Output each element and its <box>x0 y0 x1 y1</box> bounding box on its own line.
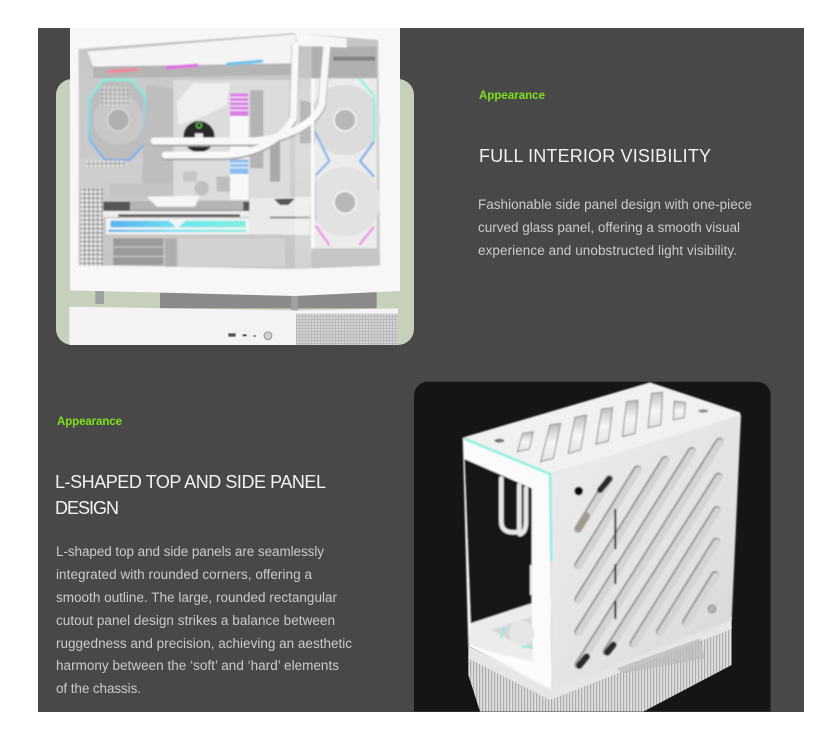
PCIe brackets <box>113 238 285 267</box>
green backdrop card <box>56 79 414 345</box>
text block: bottom description: smooth outline. The large, rounded rectangular <box>56 590 338 605</box>
heading: L-shaped top and side panel design: L-SHAPED TOP AND SIDE PANEL <box>55 472 326 492</box>
top shroud <box>87 34 297 67</box>
base mesh vent <box>296 314 398 345</box>
text block: bottom description: cutout panel design strikes a balance between <box>56 613 335 628</box>
ribbed base unit <box>468 617 732 712</box>
motherboard <box>110 80 290 200</box>
side panel with diagonal cutouts <box>550 415 741 690</box>
rear fan <box>80 78 147 160</box>
perforated rear panel <box>81 188 103 266</box>
RAM sticks with RGB <box>230 93 248 200</box>
text block: bottom description: ruggedness and precision, achieving an aesthetic <box>56 636 352 651</box>
support legs <box>95 290 298 311</box>
panel: case exterior photo <box>414 382 771 712</box>
cyan light edge <box>465 439 551 562</box>
text block: top description <box>478 197 752 258</box>
black backdrop card <box>414 382 771 712</box>
heading: L-shaped top and side panel design: DESIGN <box>55 498 119 518</box>
text block: bottom description: L-shaped top and side panels are seamlessly <box>56 544 324 559</box>
text block: bottom description <box>56 544 352 696</box>
glass window <box>79 33 380 269</box>
lower base chassis <box>69 307 398 345</box>
text block: top description: curved glass panel, offering a smooth visual <box>478 220 740 235</box>
stand shadow strip <box>160 292 377 308</box>
liquid cooling tubes <box>300 100 315 143</box>
top face with slots <box>463 382 741 474</box>
front ports <box>228 332 272 340</box>
front frame and window <box>463 437 552 690</box>
panel: PC case interior photo <box>56 25 414 345</box>
graphics card <box>103 196 310 235</box>
text block: top description: experience and unobstructed light visibility. <box>478 243 737 258</box>
text block: bottom description: integrated with rounded corners, offering a <box>56 567 312 582</box>
text block: top description: Fashionable side panel design with one-piece <box>478 197 752 212</box>
text block: bottom description: harmony between the ‘soft’ and ‘hard’ elements <box>56 658 339 673</box>
front fans <box>310 78 380 248</box>
RGB light strips <box>107 61 263 72</box>
heading: full interior visibility: FULL INTERIOR VISIBILITY <box>479 146 711 166</box>
label: Appearance (bottom): Appearance <box>57 416 122 428</box>
heading: L-shaped top and side panel design <box>55 472 326 518</box>
pump display <box>183 121 215 152</box>
glass corner highlight <box>295 33 312 269</box>
chassis floor with fan <box>468 603 533 662</box>
text block: bottom description: of the chassis. <box>56 681 141 696</box>
white case body <box>70 25 400 296</box>
label: Appearance (top): Appearance <box>479 90 545 102</box>
cooling tubes seen through window <box>501 478 526 534</box>
